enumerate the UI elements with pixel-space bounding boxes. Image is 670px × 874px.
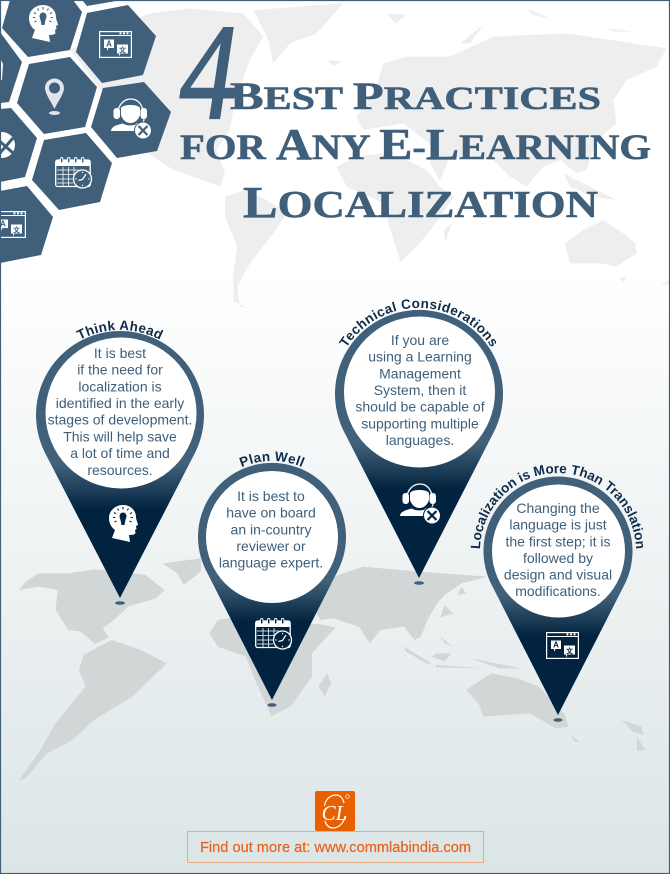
body text: if the need for xyxy=(77,362,163,378)
curved heading: Localization is More Than Translation xyxy=(470,464,644,548)
pin 3: Technical Considerations xyxy=(335,299,503,585)
hexagon: left wrench xyxy=(0,108,37,182)
hexagon: translation xyxy=(76,5,156,83)
logo xyxy=(315,791,355,831)
curved heading: Technical Considerations xyxy=(338,299,496,346)
body text: If you are xyxy=(391,332,449,348)
body text: design and visual xyxy=(504,567,612,583)
icon: translation xyxy=(547,633,578,658)
footer link box xyxy=(188,832,484,862)
circle xyxy=(46,338,196,488)
hexagon: location pin xyxy=(17,57,97,134)
body text: modifications. xyxy=(515,583,601,599)
body text: It is best to xyxy=(237,488,305,504)
body text: System, then it xyxy=(374,382,466,398)
icon: calendar xyxy=(256,618,292,649)
pin 2: Plan Well xyxy=(198,452,346,707)
world map: bottom grey xyxy=(19,558,645,780)
title line 1: BEST PRACTICES xyxy=(230,75,601,118)
body text: This will help save xyxy=(63,428,177,444)
base dot xyxy=(554,718,562,722)
hexagon: calendar xyxy=(32,133,112,210)
pin shape xyxy=(36,331,204,598)
pin shape xyxy=(198,463,346,700)
pin 1: Think Ahead xyxy=(36,320,204,605)
hexagon: brain xyxy=(2,0,82,57)
body text: It is best xyxy=(94,345,146,361)
numeral 4: 4 xyxy=(180,0,238,148)
icon: support xyxy=(400,484,440,524)
pin 4: Localization is More Than Translation xyxy=(470,464,644,722)
pin shape xyxy=(335,310,503,578)
body text: languages. xyxy=(386,432,454,448)
body text: reviewer or xyxy=(236,538,306,554)
base dot xyxy=(414,581,424,585)
base dot xyxy=(115,601,125,605)
body text: the first step; it is xyxy=(505,533,611,549)
hexagon: top sliver xyxy=(83,1,116,6)
body text: resources. xyxy=(87,462,153,478)
title line 2: FOR ANY E-LEARNING xyxy=(180,120,651,169)
hexagon: left upper xyxy=(0,32,22,103)
title line 3: LOCALIZATION xyxy=(243,178,598,227)
circle xyxy=(492,484,625,618)
title xyxy=(180,0,651,227)
world map: top faint xyxy=(70,3,670,308)
body text: should be capable of xyxy=(355,399,485,415)
body text: localization is xyxy=(78,378,162,394)
hexagon: bottom left translation xyxy=(0,186,53,263)
icon: brain xyxy=(109,505,138,542)
body text: have on board xyxy=(226,505,316,521)
body text: using a Learning xyxy=(368,349,472,365)
body text: followed by xyxy=(523,550,593,566)
body text: supporting multiple xyxy=(361,415,479,431)
hexagon: support xyxy=(91,82,171,158)
curved heading: Think Ahead xyxy=(76,320,164,340)
circle xyxy=(206,471,338,603)
footer link box: Find out more at: www.commlabindia.com xyxy=(200,840,471,856)
curved heading: Plan Well xyxy=(239,452,305,467)
circle xyxy=(344,316,495,468)
body text: Management xyxy=(379,365,461,381)
body text: an in-country xyxy=(231,521,311,537)
logo: CL xyxy=(322,801,347,825)
hexagon cluster xyxy=(0,0,171,263)
body text: a lot of time and xyxy=(70,445,170,461)
pin shape xyxy=(484,477,633,715)
body text: language expert. xyxy=(219,555,323,571)
body text: language is just xyxy=(509,517,607,533)
body text: Changing the xyxy=(516,500,600,516)
base dot xyxy=(268,703,276,707)
body text: stages of development. xyxy=(48,412,192,428)
body text: identified in the early xyxy=(56,395,184,411)
